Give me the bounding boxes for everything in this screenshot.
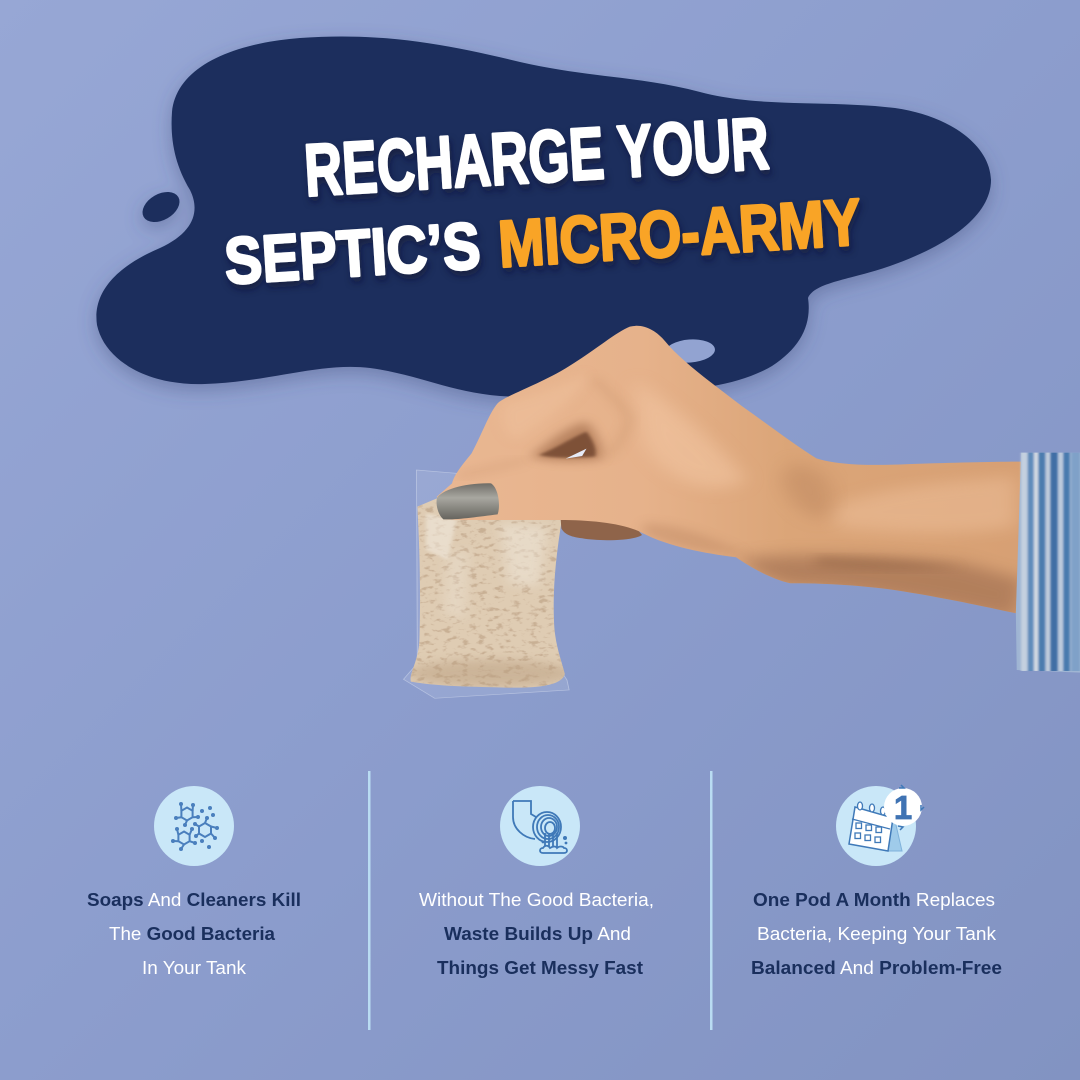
icon: pipe [500, 786, 580, 866]
text: one pod a month: Balanced And Problem-Free [751, 957, 1002, 978]
shirt sleeve cuff [1016, 453, 1080, 673]
icon: bacteria [154, 786, 234, 866]
text: one pod a month [751, 889, 1002, 978]
icon: calendar with number one [836, 785, 924, 866]
text: waste builds up: Things Get Messy Fast [437, 957, 643, 978]
title [222, 102, 863, 298]
text: waste builds up: Waste Builds Up And [444, 923, 631, 944]
title: RECHARGE YOUR [302, 102, 771, 212]
icon: calendar with number one: 1 [894, 789, 912, 826]
text: soaps and cleaners: The Good Bacteria [109, 923, 276, 944]
title: MICRO-ARMY [496, 184, 863, 281]
text: waste builds up: Without The Good Bacteria, [419, 889, 654, 910]
title: SEPTIC’S [222, 208, 482, 298]
pod sachet [403, 470, 573, 698]
text: waste builds up [419, 889, 654, 978]
text: one pod a month: One Pod A Month Replaces [753, 889, 995, 910]
hand holding pod photo illustration [403, 326, 1080, 698]
navy paint blob [96, 37, 991, 397]
text: soaps and cleaners [87, 889, 301, 978]
divider left [368, 771, 370, 1030]
text: soaps and cleaners: In Your Tank [142, 957, 247, 978]
thumbnail [437, 483, 499, 519]
hand and forearm [437, 326, 1025, 620]
divider right [710, 771, 712, 1030]
text: one pod a month: Bacteria, Keeping Your Tank [757, 923, 997, 944]
text: soaps and cleaners: Soaps And Cleaners Kill [87, 889, 301, 910]
